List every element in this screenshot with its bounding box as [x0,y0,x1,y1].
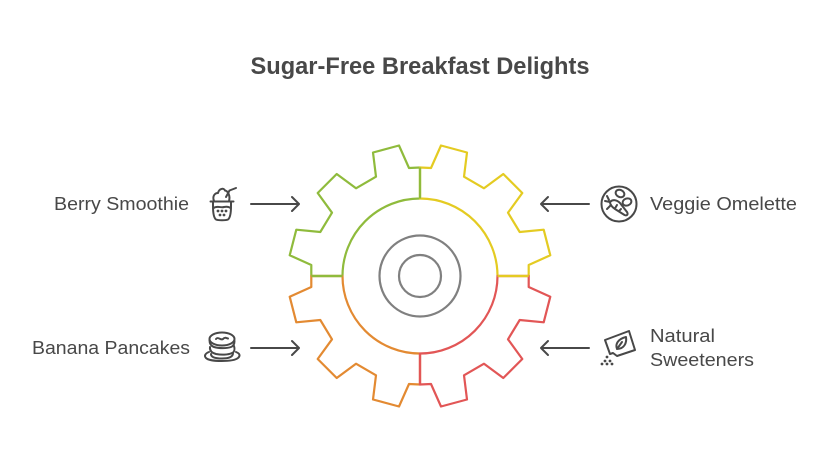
title: Sugar-Free Breakfast Delights [250,53,590,80]
arrow: Natural Sweeteners to gear [541,341,589,355]
gear diagram [290,146,550,406]
label: Natural Sweeteners: Natural [650,326,715,346]
label: Veggie Omelette: Veggie Omelette [650,194,797,214]
outer hub ring [380,236,460,316]
gear segment: banana pancakes (orange) [290,276,420,406]
arrow: Veggie Omelette to gear [541,197,589,211]
arrow: Banana Pancakes to gear [251,341,299,355]
label: Banana Pancakes: Banana Pancakes [32,338,190,358]
label: Berry Smoothie: Berry Smoothie [54,194,189,214]
arrow: Berry Smoothie to gear [251,197,299,211]
re-drawn dividers [311,168,420,276]
icon: sweetener packet [601,331,635,365]
gear segment: berry smoothie (green) [290,146,420,276]
icon: smoothie cup [210,188,236,220]
inner hub ring [399,255,441,297]
gear segment: natural sweeteners (red) [420,276,550,406]
gear segment: veggie omelette (yellow) [420,146,550,276]
icon: veggie omelette [602,186,636,222]
icon: pancake stack [205,332,240,361]
label: Natural Sweeteners: Sweeteners [650,350,754,370]
